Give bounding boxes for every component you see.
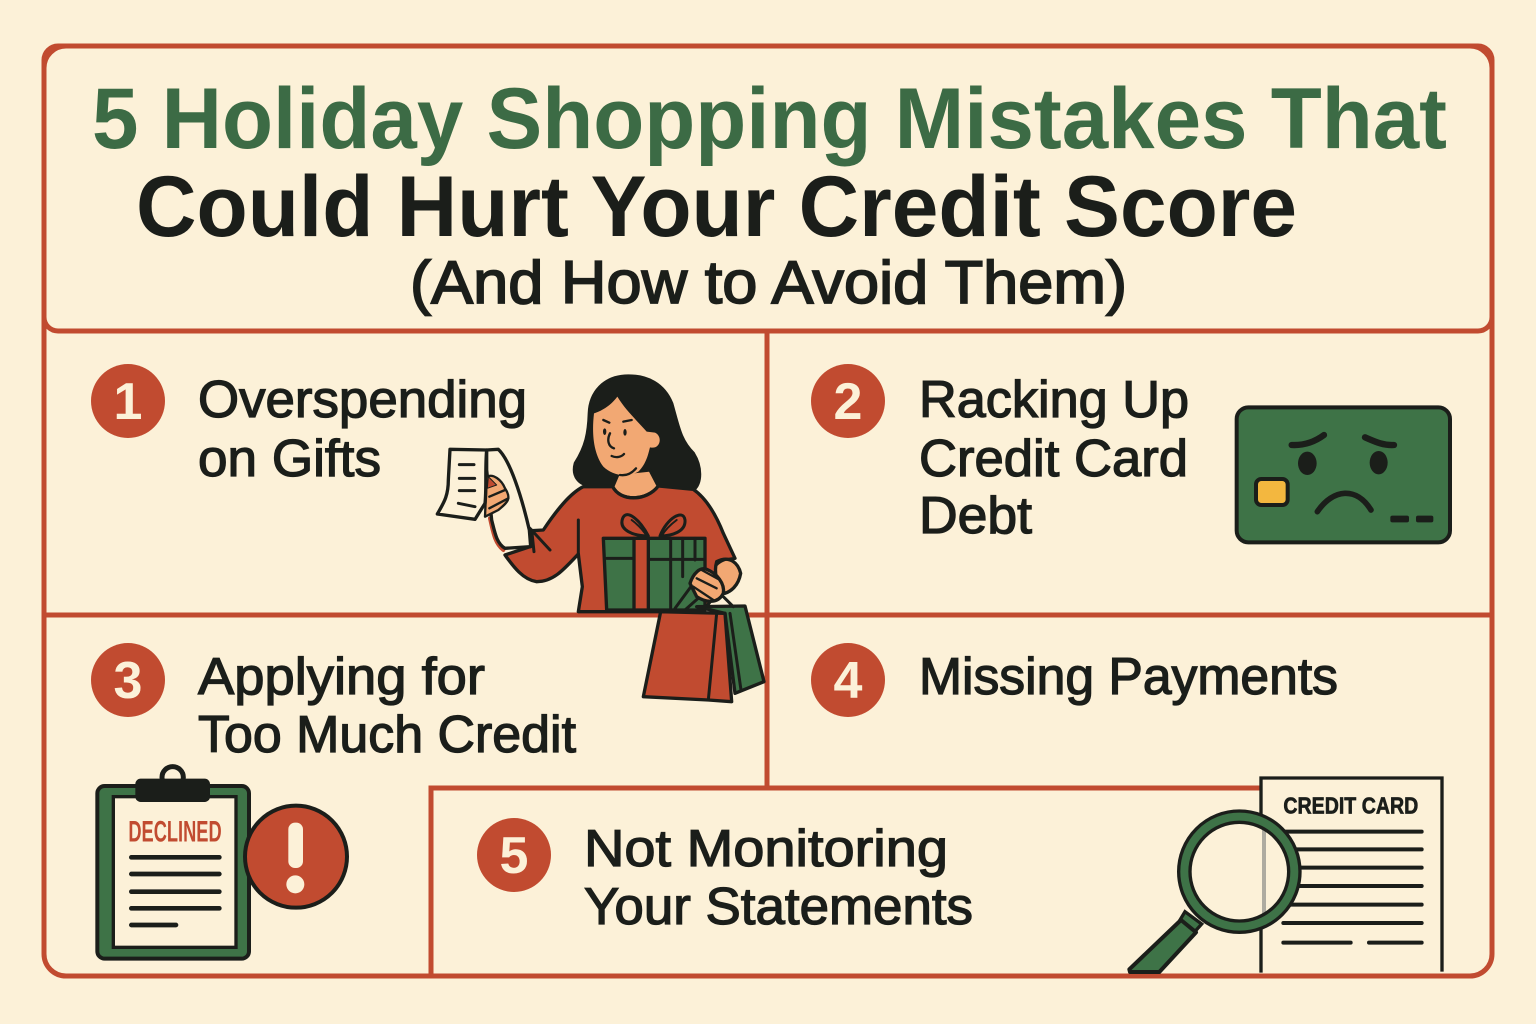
icon: sad credit card <box>1237 407 1450 542</box>
heading 3: Too Much Credit <box>198 706 577 764</box>
heading 5 <box>584 820 973 936</box>
bag handles <box>675 583 733 610</box>
forearm and hand <box>715 559 741 593</box>
heading 1: Overspending <box>198 371 527 429</box>
number badge 3: 3 <box>114 652 142 710</box>
heading 2: Debt <box>919 487 1033 545</box>
heading 1 <box>198 371 527 488</box>
receipt back <box>487 449 531 548</box>
illustration: woman with receipt, gift and bags <box>437 376 764 702</box>
panel 2: racking up credit card debt <box>811 364 1450 545</box>
heading 5: Your Statements <box>584 878 973 936</box>
thin wrist <box>490 518 503 550</box>
number badge 2 <box>811 364 885 438</box>
gift box <box>603 538 705 610</box>
heading 1: on Gifts <box>198 430 381 488</box>
heading 5: Not Monitoring <box>584 820 948 878</box>
icon: declined clipboard with alert <box>97 767 347 959</box>
heading 3 <box>198 648 577 764</box>
hair <box>574 376 700 490</box>
icon: declined clipboard with alert: DECLINED <box>128 816 222 849</box>
receipt front <box>437 449 487 519</box>
title: Could Hurt Your Credit Score <box>136 159 1297 255</box>
panel 1: overspending on gifts <box>91 364 764 702</box>
green shopping bag <box>697 606 764 693</box>
panel 3: applying for too much credit <box>91 643 577 959</box>
neck and face <box>613 470 658 498</box>
title: 5 Holiday Shopping Mistakes That <box>92 71 1447 167</box>
number badge 1: 1 <box>114 373 142 431</box>
sweater <box>505 486 735 612</box>
number badge 2: 2 <box>834 373 862 431</box>
number badge 4: 4 <box>834 652 863 710</box>
panel 5: not monitoring your statements <box>477 778 1442 973</box>
icon: magnifier over credit card statement: CREDIT CARD <box>1283 792 1418 818</box>
red shopping bag <box>643 612 732 702</box>
title <box>92 71 1447 316</box>
hand holding receipt <box>485 476 508 517</box>
heading 2 <box>919 371 1189 545</box>
icon: magnifier over credit card statement <box>1129 778 1442 973</box>
heading 3: Applying for <box>198 648 485 706</box>
number badge 1 <box>91 364 165 438</box>
heading 2: Credit Card <box>919 430 1188 488</box>
heading 2: Racking Up <box>919 371 1189 429</box>
number badge 3 <box>91 643 165 717</box>
panel 4: missing payments <box>811 643 1338 717</box>
title: (And How to Avoid Them) <box>410 249 1127 316</box>
gift bow <box>622 515 685 536</box>
number badge 4 <box>811 643 885 717</box>
heading 4: Missing Payments <box>919 648 1338 706</box>
number badge 5: 5 <box>500 827 528 885</box>
number badge 5 <box>477 818 551 892</box>
